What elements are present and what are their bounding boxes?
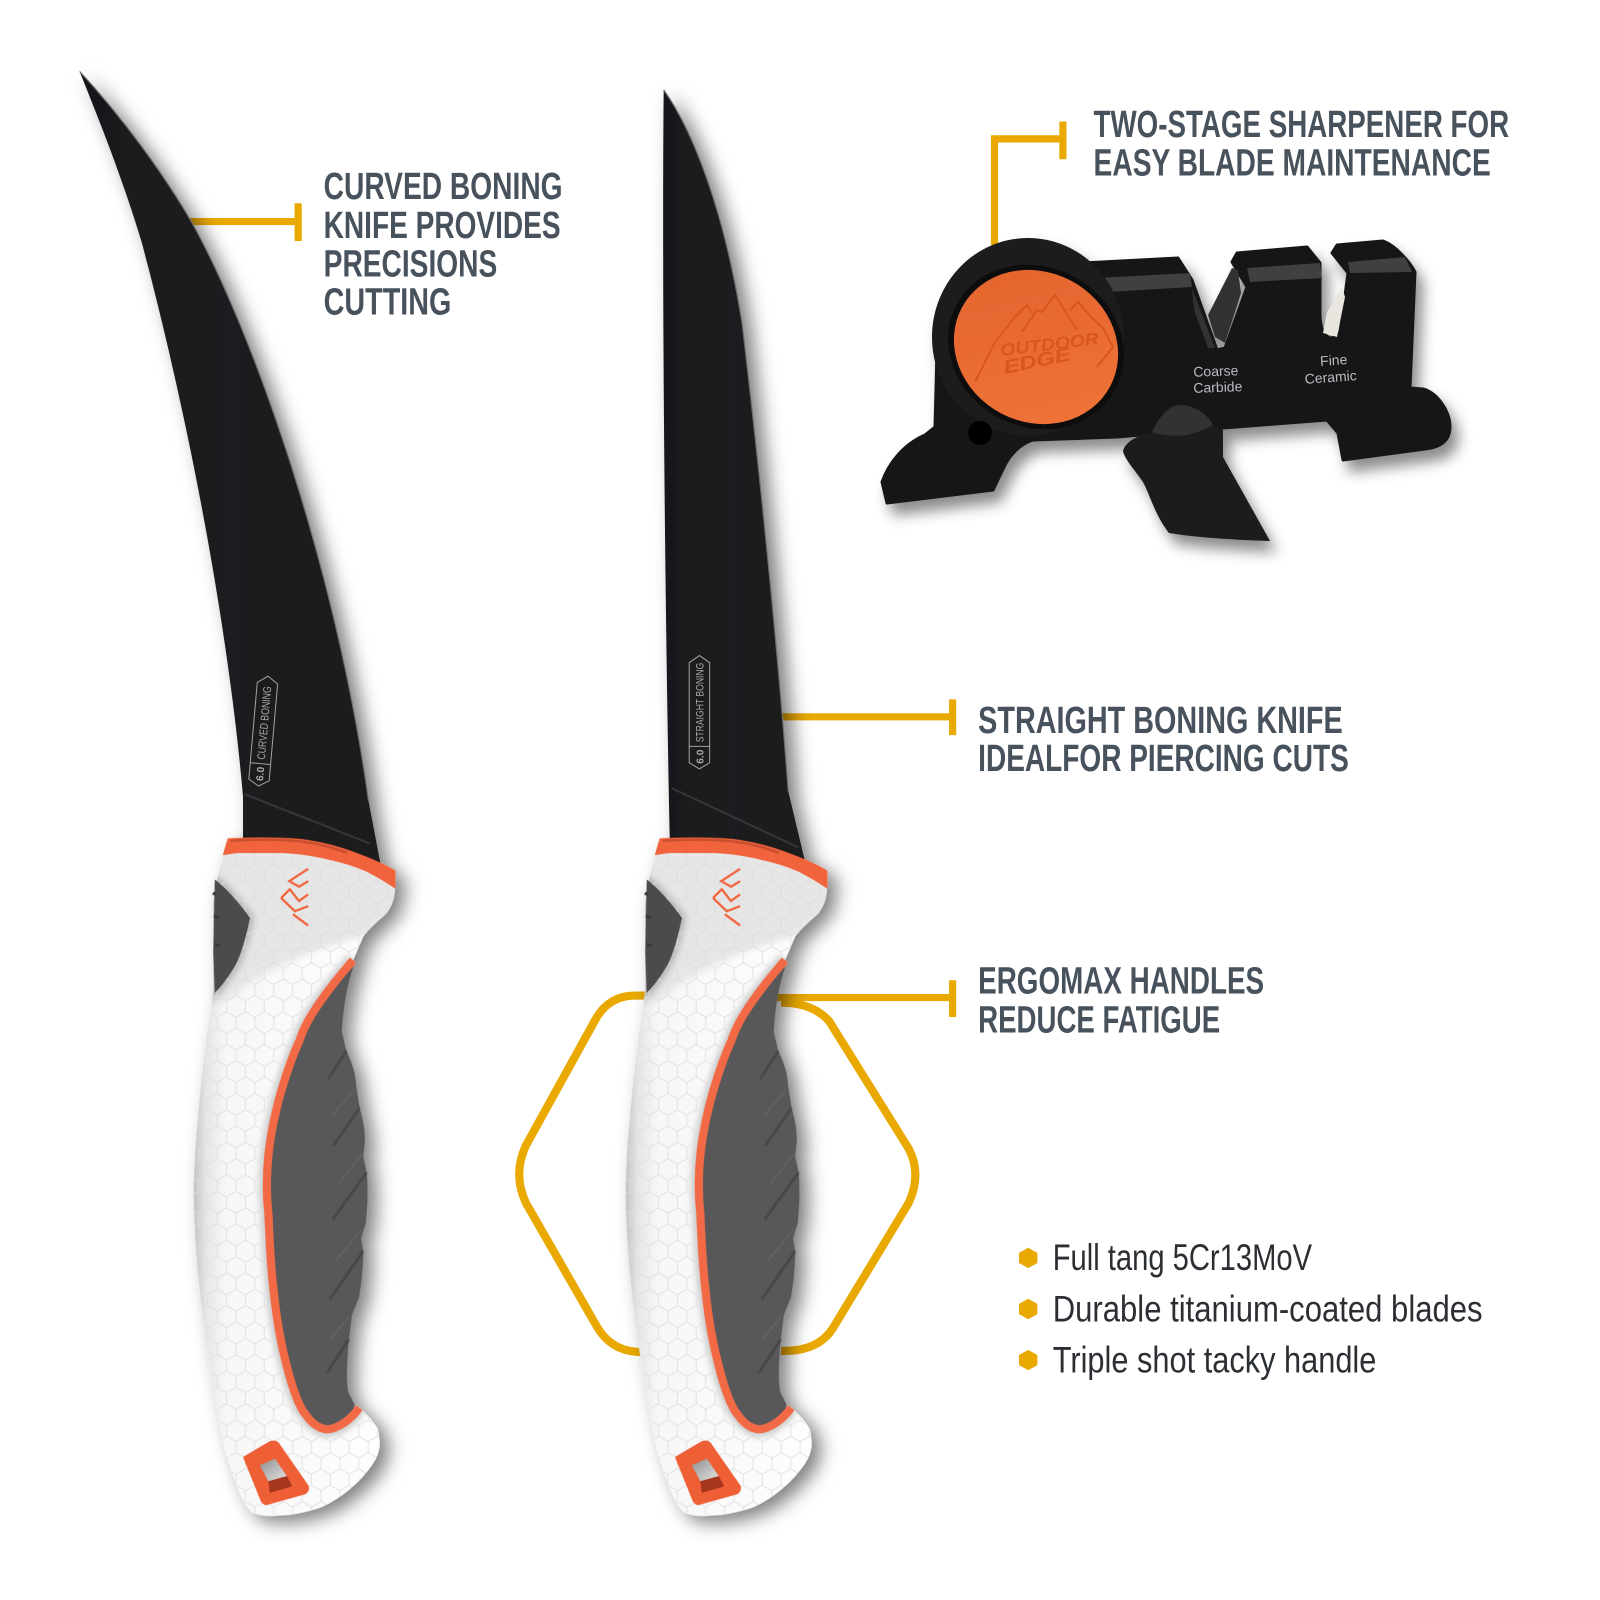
callout line: curved blade <box>189 203 298 241</box>
handle shading <box>644 853 827 1440</box>
blade bevel line <box>245 794 370 843</box>
handle shading <box>212 853 395 1440</box>
mountain emblem <box>975 295 1113 382</box>
curved blade <box>80 71 381 866</box>
lanyard hole <box>245 1442 307 1504</box>
heading: straight boning knife: STRAIGHT BONING KNIFE <box>978 700 1343 742</box>
grip ribs <box>759 1051 799 1372</box>
ceramic slot <box>1323 287 1345 337</box>
text: titanium: Durable titanium-coated blades <box>1053 1288 1483 1329</box>
carbide notch faces <box>1192 268 1241 348</box>
slot labels: Carbide <box>1193 378 1243 396</box>
callout line: straight blade <box>776 699 953 735</box>
straight boning knife <box>626 90 840 1516</box>
straight knife handle <box>626 838 840 1516</box>
orange collar <box>655 838 827 888</box>
orange collar <box>223 838 395 888</box>
collar dark top <box>231 840 347 853</box>
honeycomb texture <box>194 848 395 1516</box>
heading: two-stage sharpener <box>1094 104 1509 185</box>
callout line: sharpener <box>995 122 1063 245</box>
feature list <box>1019 1237 1483 1380</box>
ring inner recess <box>919 234 1153 460</box>
grey grip <box>267 960 368 1429</box>
lanyard opening <box>260 1459 287 1481</box>
blade plaque: curved boning: 6.0 <box>255 766 267 782</box>
sharpener body and feet <box>882 241 1450 503</box>
hexagon outline behind straight knife handle <box>519 996 915 1352</box>
grip ribs <box>327 1051 367 1372</box>
blade plaque: straight boning: STRAIGHT BONING <box>695 663 707 742</box>
blade edge highlight <box>664 90 788 791</box>
logo mark <box>281 869 308 926</box>
lanyard hole <box>677 1442 739 1504</box>
orange inlay line <box>699 960 791 1429</box>
blade plaque: curved boning: CURVED BONING <box>256 686 274 760</box>
leg dome <box>1152 405 1213 436</box>
callout line: handles <box>776 980 953 1017</box>
heading: curved boning knife: CURVED BONING <box>324 166 563 208</box>
curved knife handle <box>194 838 408 1516</box>
lanyard opening <box>692 1459 719 1481</box>
slot labels: Ceramic <box>1304 367 1357 387</box>
blade plaque: curved boning <box>248 675 278 787</box>
bullet: titanium <box>1019 1299 1037 1319</box>
orange grip disc: EDGE <box>1002 344 1074 379</box>
heading: ergomax handles <box>978 960 1264 1041</box>
orange grip disc <box>927 241 1145 453</box>
heading: ergomax handles: ERGOMAX HANDLES <box>978 960 1264 1002</box>
blade plaque: straight boning: 6.0 <box>696 749 707 764</box>
text: handle: Triple shot tacky handle <box>1053 1339 1376 1380</box>
blade edge highlight <box>80 71 369 802</box>
slot labels <box>1193 351 1357 396</box>
mount hole <box>968 421 992 445</box>
honeycomb texture <box>626 848 827 1516</box>
lanyard inner <box>700 1476 724 1493</box>
heading: curved boning knife <box>324 166 563 323</box>
heading: curved boning knife: PRECISIONS <box>324 244 497 286</box>
handle white body <box>626 848 827 1516</box>
grip rib highlights <box>330 1089 363 1339</box>
text: full tang: Full tang 5Cr13MoV <box>1053 1237 1312 1278</box>
heading: straight boning knife <box>978 700 1349 780</box>
bullet: handle <box>1019 1350 1037 1370</box>
sharpener center leg <box>1123 425 1270 541</box>
grip rib highlights <box>762 1089 795 1339</box>
lanyard inner <box>268 1476 292 1493</box>
handle white body <box>194 848 395 1516</box>
slot labels: Coarse <box>1193 362 1239 380</box>
guard wedge <box>213 880 250 993</box>
bullet: full tang <box>1019 1248 1037 1268</box>
straight blade <box>663 90 805 860</box>
slot labels: Fine <box>1320 351 1348 369</box>
collar dark top <box>663 840 779 853</box>
heading: straight boning knife: IDEALFOR PIERCING CUTS <box>978 738 1349 780</box>
heading: curved boning knife: KNIFE PROVIDES <box>324 205 561 247</box>
sharpener ring <box>932 238 1124 436</box>
sharpener <box>882 234 1450 541</box>
brand text: OUTDOOR <box>999 329 1101 360</box>
logo mark <box>713 869 740 926</box>
leg sheen <box>1178 480 1250 532</box>
curved boning knife <box>80 71 408 1516</box>
guard notches <box>645 893 651 946</box>
guard wedge <box>645 880 682 993</box>
heading: curved boning knife: CUTTING <box>324 281 451 323</box>
blade plaque: straight boning <box>689 656 710 769</box>
guard notches <box>213 893 219 946</box>
grey grip <box>699 960 800 1429</box>
orange inlay line <box>267 960 359 1429</box>
blade bevel line <box>672 788 798 847</box>
heading: ergomax handles: REDUCE FATIGUE <box>978 999 1220 1041</box>
sharpener top bands <box>1097 257 1412 292</box>
